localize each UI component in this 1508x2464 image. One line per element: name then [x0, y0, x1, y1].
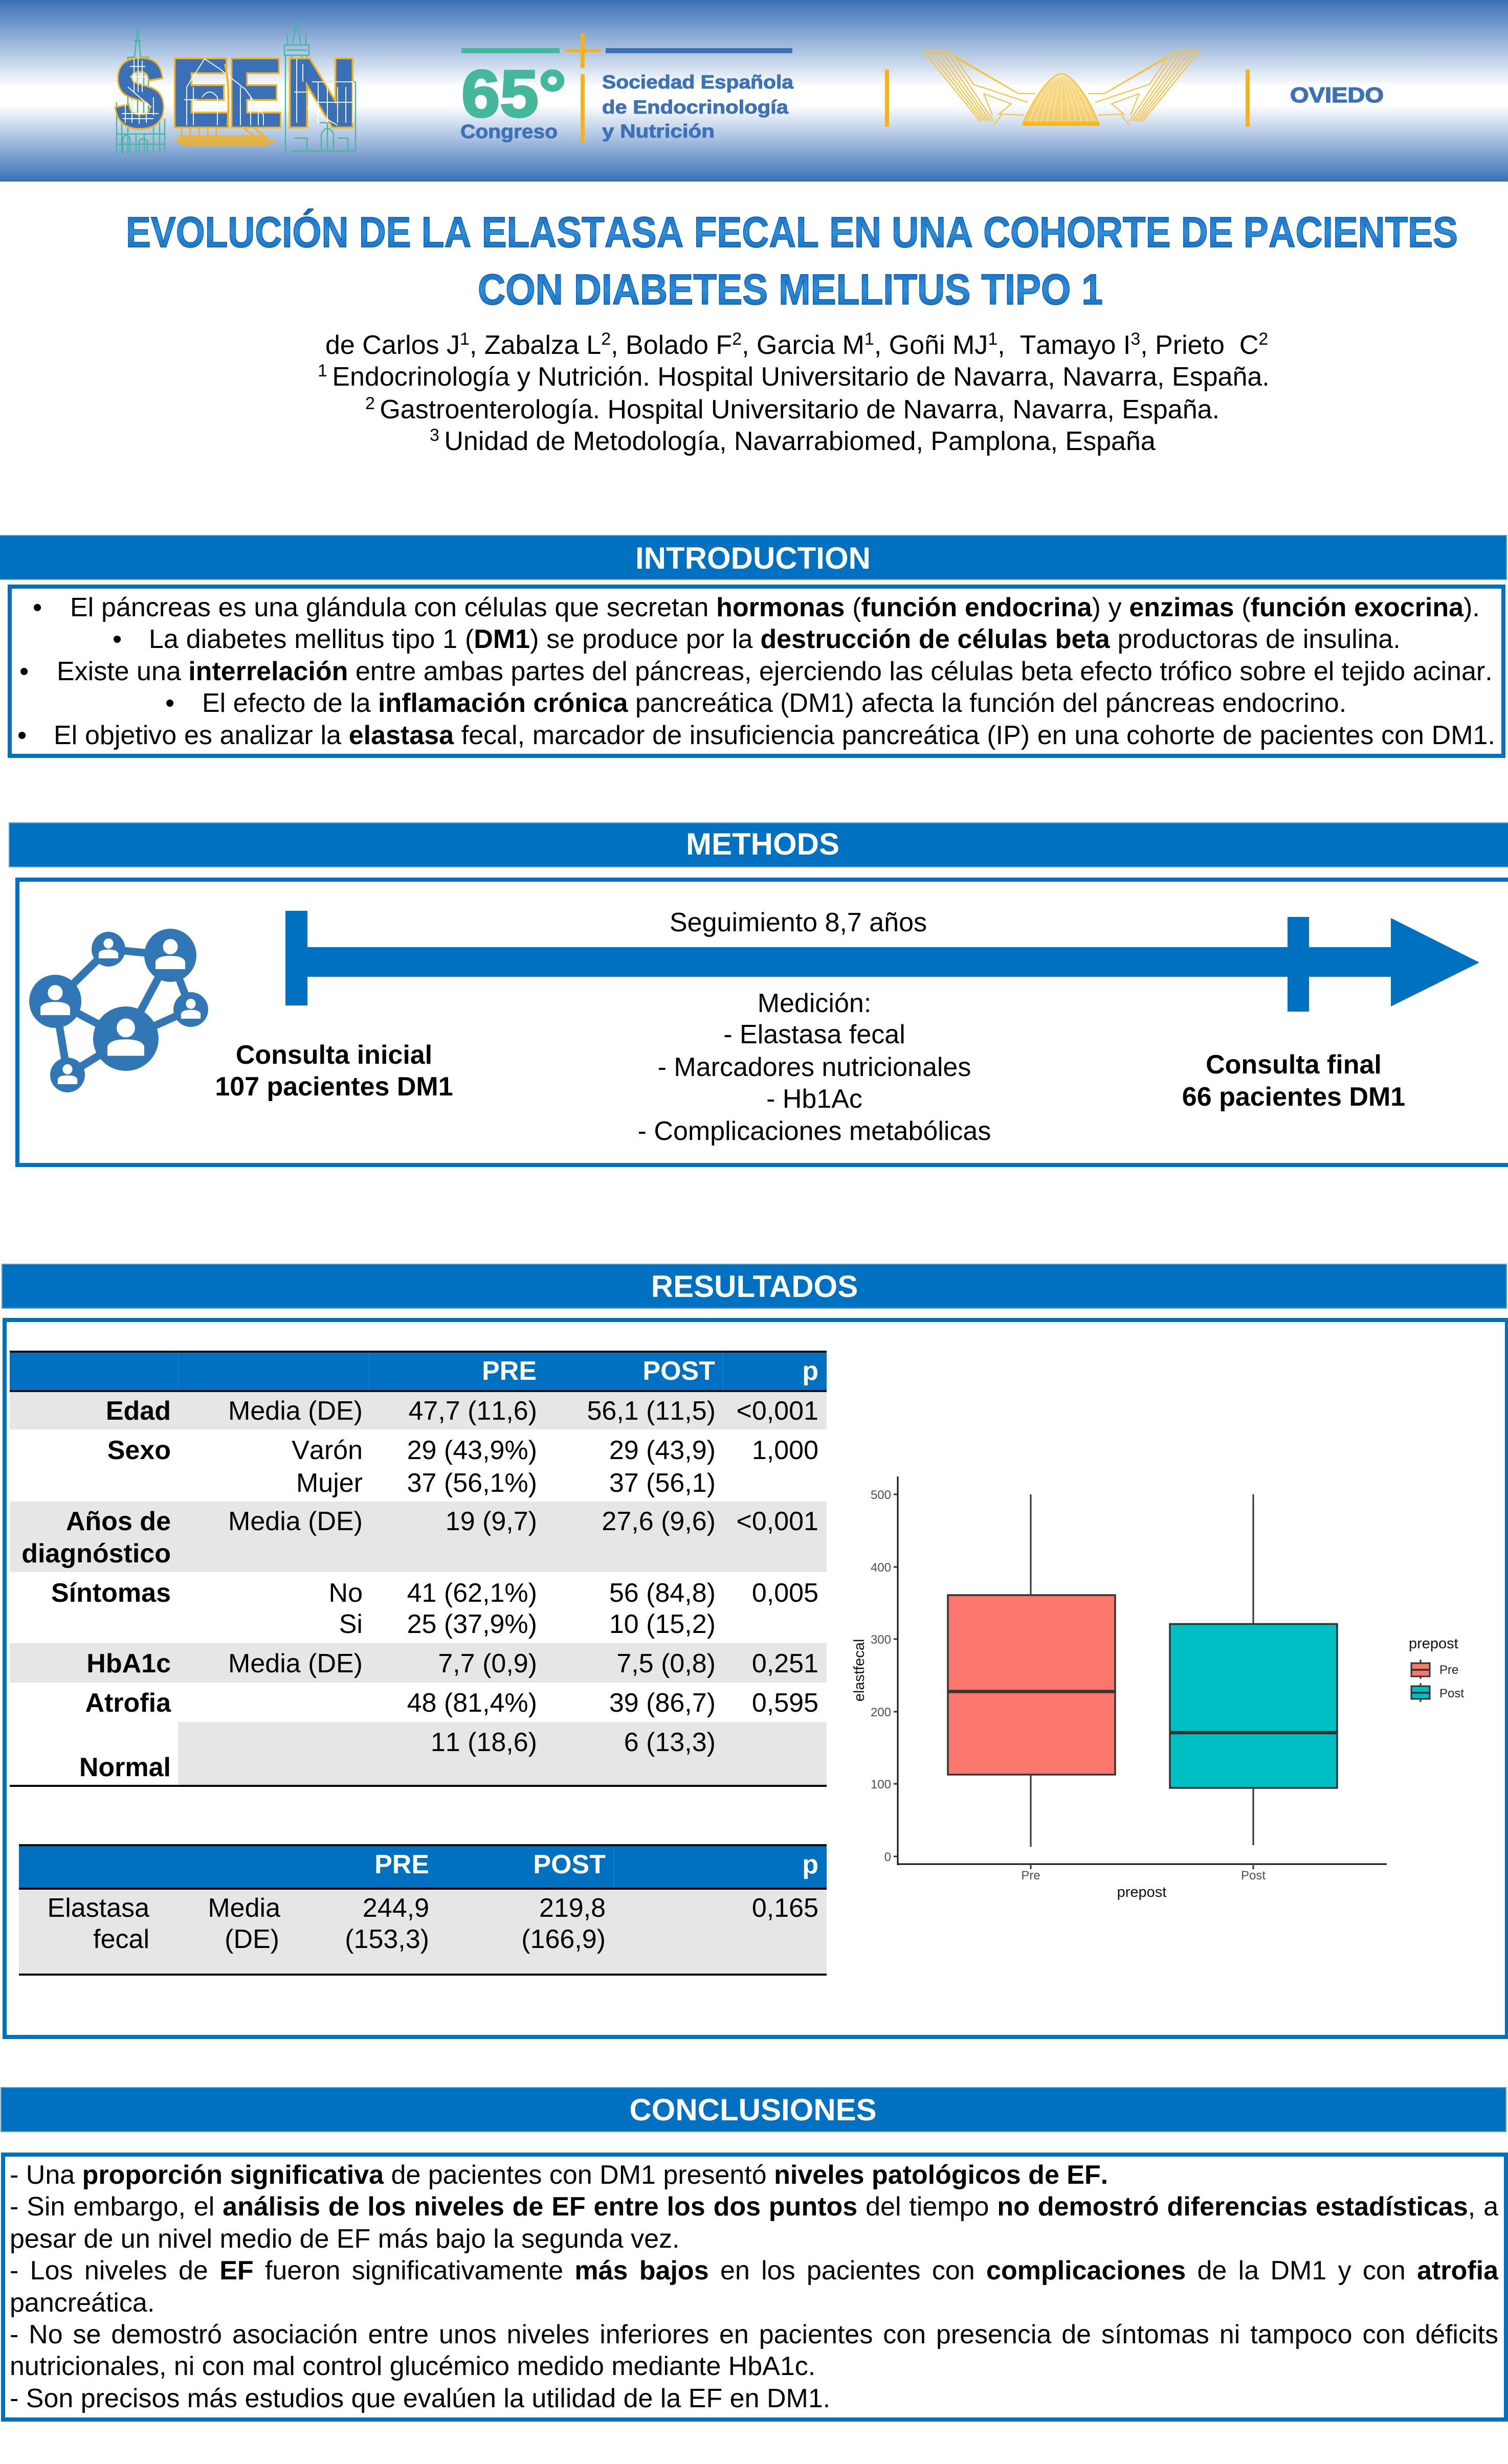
heading: introduction: INTRODUCTION — [635, 541, 871, 575]
conclusions text: - Una proporción significativa de pacientes con DM1 presentó niveles patológicos de EF. — [10, 2160, 1108, 2190]
row: atrofia: 39 (86,7) — [609, 1688, 716, 1718]
row: normal: 6 (13,3) — [624, 1728, 716, 1757]
row: edad: 56,1 (11,5) — [587, 1396, 716, 1426]
heading: resultados — [2, 1264, 1506, 1308]
legend: Post — [1439, 1687, 1464, 1700]
row: hba1c: 7,7 (0,9) — [438, 1649, 537, 1678]
society name: Sociedad Española — [602, 72, 793, 93]
affiliation 2: 2 — [365, 394, 380, 413]
legend: Pre — [1439, 1663, 1458, 1677]
authors: , Prieto C — [1140, 330, 1258, 360]
elastase values: Media — [208, 1893, 280, 1923]
row: sexo: 37 (56,1%) — [407, 1468, 537, 1498]
row: sintomas — [51, 1578, 818, 1639]
row: normal — [79, 1728, 716, 1782]
affiliation 2: Gastroenterología. Hospital Universitario de Navarra, Navarra, España. — [380, 395, 1219, 424]
row: anos de diagnostico: <0,001 — [737, 1507, 818, 1536]
row: hba1c: Media (DE) — [228, 1649, 363, 1678]
affiliation 1: 1 — [318, 361, 332, 380]
measurements list: - Marcadores nutricionales — [658, 1052, 971, 1082]
conclusions text: - Son precisos más estudios que evalúen la utilidad de la EF en DM1. — [10, 2384, 830, 2413]
letter outlines: N — [285, 40, 357, 145]
title — [126, 208, 1458, 313]
row: sintomas: Síntomas — [51, 1578, 171, 1608]
letter fills SEEN: N — [285, 40, 357, 145]
authors and affiliations — [318, 329, 1270, 456]
arrow: follow-up timeline — [285, 911, 1479, 1012]
authors: 3 — [1130, 329, 1140, 349]
elastase header: PRE — [374, 1850, 429, 1879]
row: sintomas: 56 (84,8) — [609, 1578, 716, 1608]
white monument line art over letters — [122, 57, 353, 125]
elastase header: p — [802, 1850, 818, 1879]
authors: 2 — [1258, 329, 1268, 349]
conclusions text: - Los niveles de EF fueron significativamente más bajos en los pacientes con complicaciones de la DM1 y con atrofia pancreática. — [10, 2256, 1498, 2318]
row: sexo: 29 (43,9) — [609, 1436, 716, 1465]
row: sexo: 37 (56,1) — [609, 1468, 716, 1498]
row: sexo: Varón — [292, 1436, 363, 1465]
row: hba1c: 7,5 (0,8) — [616, 1649, 716, 1678]
initial visit label: Consulta inicial — [236, 1040, 432, 1070]
right cathedral tower and building — [284, 22, 356, 153]
legend — [1409, 1636, 1464, 1702]
y axis title: elastfecal — [851, 1639, 868, 1701]
row: sintomas: 10 (15,2) — [609, 1609, 716, 1639]
final visit label: Consulta final — [1206, 1050, 1382, 1080]
authors: 1 — [864, 329, 874, 349]
letter outlines: E — [228, 40, 282, 145]
row: sintomas: 0,005 — [752, 1578, 818, 1608]
table header: PRE — [482, 1356, 537, 1386]
row: hba1c: HbA1c — [86, 1649, 171, 1678]
authors: 1 — [460, 329, 470, 349]
letter fills SEEN: E — [228, 40, 282, 145]
table header — [482, 1356, 818, 1386]
elastase values: (DE) — [225, 1924, 279, 1954]
panel: results — [2, 1264, 1507, 2037]
measurements list: - Complicaciones metabólicas — [638, 1116, 991, 1146]
logo: 65 congress — [460, 33, 793, 143]
letter fills SEEN: S — [115, 40, 165, 146]
row: anos de diagnostico: Media (DE) — [228, 1507, 363, 1536]
conclusions box — [3, 2155, 1506, 2420]
introduction bullets: • — [33, 593, 42, 622]
row: sintomas: No — [329, 1578, 363, 1608]
row: edad: <0,001 — [737, 1396, 818, 1426]
title: CON DIABETES MELLITUS TIPO 1 — [478, 265, 1103, 313]
row: anos de diagnostico: 19 (9,7) — [446, 1507, 537, 1536]
introduction bullets — [17, 593, 1495, 750]
final visit label: 66 pacientes DM1 — [1182, 1082, 1405, 1112]
society name — [602, 72, 793, 142]
heading: introduction — [0, 535, 1506, 579]
initial visit label — [215, 1040, 453, 1102]
elastase values: (166,9) — [521, 1924, 606, 1954]
table header: p — [802, 1356, 818, 1386]
row: sexo: 29 (43,9%) — [407, 1436, 537, 1465]
conclusions text: - Sin embargo, el análisis de los niveles de EF entre los dos puntos del tiempo no demostró diferencias estadísticas, a pesar de un nivel medio de EF más bajo la segunda vez. — [10, 2192, 1498, 2254]
initial visit label: 107 pacientes DM1 — [215, 1072, 453, 1102]
row: anos de diagnostico: diagnóstico — [21, 1539, 171, 1569]
society name: y Nutrición — [602, 121, 715, 142]
introduction bullets: El páncreas es una glándula con células que secretan hormonas (función endocrina) y enzimas (función exocrina). — [70, 593, 1480, 622]
box: post — [1170, 1494, 1337, 1845]
y axis: 200 — [871, 1706, 891, 1719]
affiliation 1: Endocrinología y Nutrición. Hospital Universitario de Navarra, Navarra, España. — [332, 362, 1270, 392]
final visit label — [1182, 1050, 1405, 1112]
65 degrees: 65° — [461, 56, 566, 131]
letter outlines: S — [115, 40, 165, 146]
row: anos de diagnostico — [21, 1507, 818, 1569]
letter fills SEEN: E — [171, 40, 230, 145]
authors: de Carlos J — [325, 330, 460, 360]
results box — [5, 1320, 1507, 2037]
gold chain accent — [225, 64, 229, 125]
row: anos de diagnostico: Años de — [66, 1507, 171, 1536]
x axis labels: Post — [1241, 1869, 1266, 1883]
row: atrofia: Atrofia — [85, 1688, 171, 1718]
heading: conclusiones — [1, 2088, 1506, 2132]
header banner — [0, 0, 1508, 182]
introduction bullets: • — [17, 721, 27, 750]
row: normal: Normal — [79, 1753, 171, 1782]
logo: SEEN with monuments — [115, 22, 357, 153]
row: sexo — [107, 1436, 818, 1498]
elastase header — [374, 1850, 818, 1879]
panel: methods — [9, 823, 1508, 1165]
authors: , Goñi MJ — [874, 330, 988, 360]
legend: prepost — [1409, 1636, 1458, 1652]
heading: resultados: RESULTADOS — [651, 1269, 858, 1304]
y axis: 0 — [884, 1850, 891, 1864]
elastase values: 244,9 — [363, 1893, 429, 1923]
authors: 2 — [601, 329, 611, 349]
elastase values: 0,165 — [752, 1893, 818, 1923]
row: atrofia: 48 (81,4%) — [407, 1688, 537, 1718]
icon: patient network — [29, 929, 208, 1092]
affiliation 3: Unidad de Metodología, Navarrabiomed, Pamplona, España — [444, 427, 1156, 456]
row: normal: 11 (18,6) — [431, 1728, 537, 1757]
row: sintomas: 25 (37,9%) — [407, 1609, 537, 1639]
letter fills SEEN — [115, 40, 357, 146]
introduction bullets: • — [113, 624, 122, 654]
letter outlines: E — [171, 40, 230, 145]
elastase header: POST — [533, 1850, 606, 1879]
row: hba1c: 0,251 — [752, 1649, 818, 1678]
row: edad: Media (DE) — [228, 1396, 363, 1426]
introduction box — [10, 587, 1503, 756]
conclusions text — [10, 2159, 1498, 2417]
elastase values: fecal — [93, 1924, 149, 1954]
authors: 2 — [732, 329, 742, 349]
affiliation 3: 3 — [430, 425, 444, 445]
methods box — [17, 880, 1508, 1165]
heading: methods — [9, 823, 1508, 867]
row: sintomas: Si — [339, 1609, 363, 1639]
table: patient characteristics — [10, 1351, 827, 1787]
x axis labels — [1021, 1869, 1266, 1900]
y axis: 500 — [871, 1488, 891, 1502]
elastase values: (153,3) — [345, 1924, 429, 1954]
measurements list: - Hb1Ac — [766, 1084, 862, 1114]
row: atrofia: 0,595 — [752, 1688, 818, 1718]
row: edad: Edad — [106, 1396, 171, 1426]
chart: elastase box plot — [851, 1476, 1464, 1900]
authors: , Tamayo I — [997, 330, 1130, 360]
panel: conclusions — [1, 2088, 1506, 2420]
logo: Oviedo building — [923, 51, 1200, 126]
heading: conclusiones: CONCLUSIONES — [629, 2093, 877, 2127]
y axis: 100 — [871, 1778, 891, 1791]
y axis: 400 — [871, 1561, 891, 1575]
row: sexo: 1,000 — [752, 1436, 818, 1465]
separator right — [1246, 70, 1250, 127]
society name: de Endocrinología — [602, 97, 788, 118]
x axis labels: Pre — [1021, 1869, 1040, 1883]
x axis labels: prepost — [1117, 1884, 1166, 1900]
heading: methods: METHODS — [686, 827, 839, 861]
conclusions text: - No se demostró asociación entre unos niveles inferiores en pacientes con presencia de síntomas ni tampoco con déficits nutricionales, ni con mal control glucémico medido mediante HbA1c. — [10, 2320, 1498, 2381]
row: atrofia — [85, 1688, 818, 1718]
authors: 1 — [988, 329, 997, 349]
row: sintomas: 41 (62,1%) — [407, 1578, 537, 1608]
table: fecal elastase — [19, 1844, 827, 1976]
row: anos de diagnostico: 27,6 (9,6) — [602, 1507, 716, 1536]
row: edad: 47,7 (11,6) — [408, 1396, 537, 1426]
introduction bullets: El efecto de la inflamación crónica pancreática (DM1) afecta la función del páncreas endocrino. — [202, 688, 1346, 718]
follow-up label: Seguimiento 8,7 años — [670, 908, 927, 937]
introduction bullets: Existe una interrelación entre ambas partes del páncreas, ejerciendo las células beta efecto trófico sobre el tejido acinar. — [57, 657, 1493, 686]
letter outlines — [115, 40, 357, 146]
elastase values — [48, 1893, 818, 1954]
yellow base of building — [176, 125, 274, 145]
box: pre — [948, 1494, 1115, 1847]
elastase values: Elastasa — [48, 1893, 149, 1923]
measurements list: Medición: — [758, 989, 871, 1018]
row: sexo: Mujer — [296, 1468, 363, 1498]
row: hba1c — [86, 1649, 818, 1678]
authors: , Zabalza L — [470, 330, 601, 360]
left cathedral tower — [117, 28, 165, 153]
Congreso label: Congreso — [460, 121, 558, 143]
authors: , Bolado F — [611, 330, 732, 360]
y axis: 300 — [871, 1633, 891, 1647]
separator left — [885, 70, 889, 127]
introduction bullets: • — [165, 688, 174, 718]
row: sexo: Sexo — [107, 1436, 171, 1465]
panel: introduction — [0, 535, 1506, 756]
introduction bullets: La diabetes mellitus tipo 1 (DM1) se produce por la destrucción de células beta productoras de insulina. — [149, 624, 1401, 654]
authors: , Garcia M — [742, 330, 864, 360]
introduction bullets: El objetivo es analizar la elastasa fecal, marcador de insuficiencia pancreática (IP) en una cohorte de pacientes con DM1. — [54, 721, 1495, 750]
introduction bullets: • — [19, 657, 29, 686]
table header: POST — [642, 1356, 715, 1386]
elastase values: 219,8 — [539, 1893, 606, 1923]
measurements list: - Elastasa fecal — [723, 1020, 905, 1049]
Oviedo label: OVIEDO — [1290, 83, 1384, 107]
y axis — [871, 1476, 1387, 1869]
measurements list — [638, 989, 991, 1146]
row: edad — [106, 1396, 818, 1426]
